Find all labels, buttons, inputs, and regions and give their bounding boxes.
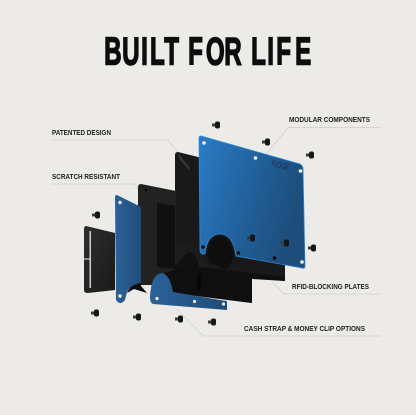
black frame, mid bbox=[127, 184, 285, 303]
label: patented design: PATENTED DESIGN bbox=[52, 128, 111, 137]
label: patented design bbox=[52, 128, 178, 153]
label: rfid-blocking plates bbox=[272, 282, 381, 294]
label: cash strap and money clip options bbox=[177, 309, 381, 336]
label: scratch resistant: SCRATCH RESISTANT bbox=[52, 172, 120, 181]
exploded wallet bbox=[84, 122, 316, 326]
blue plate, left bbox=[115, 195, 141, 303]
title: BUILT FOR LIFE bbox=[104, 30, 311, 73]
label: cash strap and money clip options: CASH STRAP & MONEY CLIP OPTIONS bbox=[244, 324, 365, 333]
logo text: RIDGE bbox=[271, 158, 290, 172]
screws bbox=[91, 122, 316, 326]
label: rfid-blocking plates: RFID-BLOCKING PLATES bbox=[292, 282, 369, 291]
blue plate, front with RIDGE logo bbox=[199, 136, 305, 270]
cash strap bbox=[84, 226, 115, 293]
label: modular components: MODULAR COMPONENTS bbox=[289, 115, 370, 124]
label: modular components bbox=[266, 115, 381, 155]
black frame, rear upper bbox=[175, 152, 285, 281]
inner recess bbox=[157, 203, 252, 277]
label: scratch resistant bbox=[52, 172, 142, 197]
blue plate, bottom bbox=[150, 273, 227, 310]
